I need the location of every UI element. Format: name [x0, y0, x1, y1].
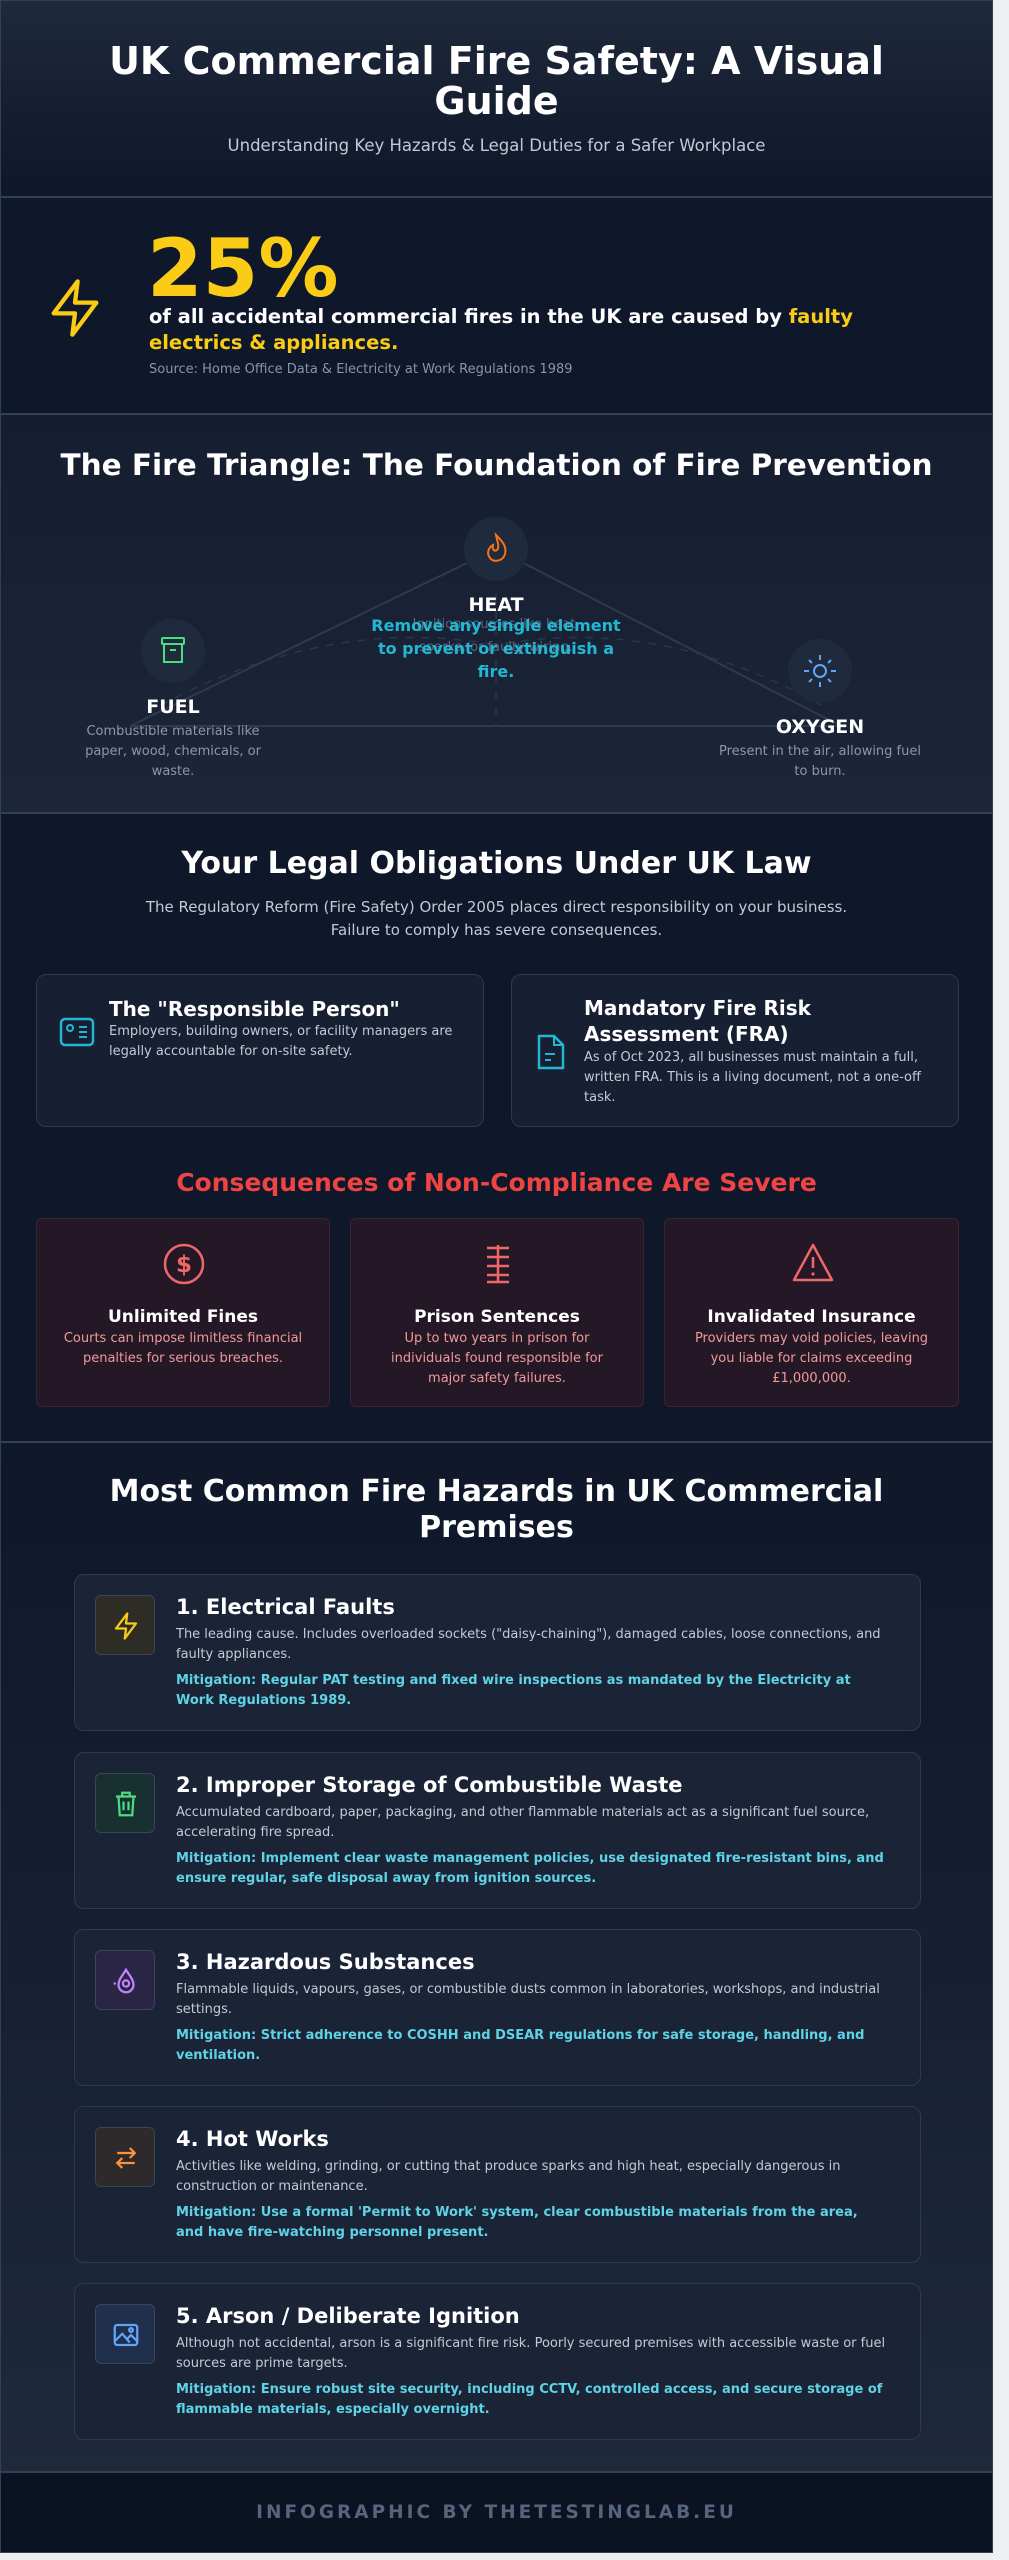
card: unlimited fines: Courts can impose limitless financial	[64, 1331, 302, 1346]
hazard 5: 5. Arson / Deliberate Ignition	[176, 2304, 520, 2328]
icon: lightning bolt	[52, 279, 98, 337]
hazard 4: Activities like welding, grinding, or cutting that produce sparks and high heat, especially dangerous in construction or maintenance.	[176, 2159, 841, 2194]
hazard 5: Although not accidental, arson is a significant fire risk. Poorly secured premises with accessible waste or fuel sources are prime targets.	[176, 2336, 885, 2371]
icon: bin	[161, 637, 185, 663]
card: insurance: Invalidated Insurance	[707, 1307, 916, 1327]
icon: id card	[60, 1018, 94, 1046]
intro text: The Regulatory Reform (Fire Safety) Order 2005 places direct responsibility on your business.	[146, 898, 847, 916]
title	[109, 39, 884, 123]
panel: legal obligations	[1, 814, 992, 1443]
icon: flame	[464, 517, 528, 581]
hazard 4: 4. Hot Works	[176, 2127, 329, 2151]
panel: fire triangle	[1, 415, 992, 814]
icon: document	[538, 1034, 564, 1070]
icon: trash	[95, 1773, 155, 1833]
hazard 5: Mitigation: Ensure robust site security, including CCTV, controlled access, and secure storage of flammable materials, especially overnight.	[176, 2382, 882, 2417]
subtitle: Understanding Key Hazards & Legal Duties for a Safer Workplace	[228, 136, 765, 155]
callout: remove element: Remove any single element to prevent or extinguish a fire.	[371, 616, 621, 681]
icon: sun	[800, 655, 836, 703]
node: oxygen: Present in the air, allowing fuel	[719, 744, 921, 759]
icon: bolt	[95, 1595, 155, 1655]
hazard 3: Mitigation: Strict adherence to COSHH and DSEAR regulations for safe storage, handling, and ventilation.	[176, 2028, 864, 2063]
hazard 1: The leading cause. Includes overloaded sockets ("daisy-chaining"), damaged cables, loose connections, and faulty appliances.	[176, 1627, 881, 1662]
hazard 4: Mitigation: Use a formal 'Permit to Work' system, clear combustible materials from the area, and have fire-watching personnel present.	[176, 2205, 858, 2240]
hazard 3: 3. Hazardous Substances	[176, 1950, 475, 1974]
heading	[110, 1474, 883, 1545]
card: unlimited fines: Unlimited Fines	[108, 1307, 258, 1327]
intro text	[146, 898, 847, 939]
title: UK Commercial Fire Safety: A Visual	[109, 39, 884, 83]
node: heat: HEAT	[468, 594, 524, 616]
card: prison: Prison Sentences	[414, 1307, 580, 1327]
node: oxygen: OXYGEN	[776, 716, 864, 738]
card: fire risk assessment: As of Oct 2023, all businesses must maintain a full, written FRA. This is a living document, not a one-off task.	[584, 1050, 921, 1105]
icon: drop	[95, 1950, 155, 2010]
triangle diagram	[130, 562, 837, 727]
card: insurance: Providers may void policies, leaving you liable for claims exceeding £1,000,000.	[695, 1331, 928, 1386]
icon: dollar	[164, 1244, 204, 1284]
stat text: of all accidental commercial fires in the UK are caused by faulty	[149, 305, 853, 328]
card: unlimited fines	[36, 1218, 330, 1407]
node: fuel: FUEL	[146, 696, 200, 718]
icon: dollar: $	[176, 1252, 192, 1278]
card: fire risk assessment: Mandatory Fire Risk	[584, 996, 811, 1020]
heat description (faint, behind): Ignition sources like heat, sparks, or faulty wiring.	[413, 617, 579, 655]
hazard 1: 1. Electrical Faults	[176, 1595, 395, 1619]
hazard 3	[74, 1929, 921, 2086]
node: heat	[464, 517, 528, 616]
card: responsible person: The "Responsible Person"	[109, 997, 400, 1021]
icon: bars	[487, 1245, 509, 1284]
intro text: Failure to comply has severe consequences.	[331, 921, 662, 939]
title: Guide	[434, 79, 559, 123]
hazard 4	[74, 2106, 921, 2263]
icon: arrows	[95, 2127, 155, 2187]
hazard 2: Mitigation: Implement clear waste management policies, use designated fire-resistant bins, and ensure regular, safe disposal away from ignition sources.	[176, 1851, 884, 1886]
hazard 5	[74, 2283, 921, 2440]
node: oxygen: to burn.	[794, 764, 846, 779]
footer	[1, 2473, 992, 2554]
node: fuel	[85, 637, 261, 779]
card: insurance	[664, 1218, 959, 1407]
card: unlimited fines: penalties for serious breaches.	[83, 1351, 283, 1366]
node: oxygen	[719, 655, 921, 779]
hazard 3: Flammable liquids, vapours, gases, or combustible dusts common in laboratories, workshops, and industrial settings.	[176, 1982, 880, 2017]
stat text: electrics & appliances.	[149, 331, 398, 354]
card: fire risk assessment	[511, 974, 959, 1127]
card: prison	[350, 1218, 644, 1407]
big stat: 25%	[147, 222, 338, 315]
header	[1, 1, 992, 198]
hazard 2: Accumulated cardboard, paper, packaging, and other flammable materials act as a significant fuel source, accelerating fire spread.	[176, 1805, 869, 1840]
heading: Premises	[419, 1510, 574, 1545]
card: responsible person	[36, 974, 484, 1127]
source: Source: Home Office Data & Electricity at Work Regulations 1989	[149, 362, 573, 377]
heading: The Fire Triangle: The Foundation of Fire Prevention	[60, 448, 932, 482]
hazard 2: 2. Improper Storage of Combustible Waste	[176, 1773, 683, 1797]
icon: image	[95, 2304, 155, 2364]
panel: hazards	[1, 1443, 992, 2473]
heading: consequences: Consequences of Non-Compliance Are Severe	[176, 1168, 817, 1197]
heading: Most Common Fire Hazards in UK Commercial	[110, 1474, 883, 1509]
heading: Your Legal Obligations Under UK Law	[181, 846, 812, 881]
stat section	[1, 198, 992, 415]
node: fuel: Combustible materials like paper, wood, chemicals, or waste.	[85, 724, 261, 779]
hazard 2	[74, 1752, 921, 1909]
stat text	[149, 305, 853, 354]
card: prison: Up to two years in prison for individuals found responsible for major safety failures.	[391, 1331, 603, 1386]
hazard 1	[74, 1574, 921, 1731]
icon: warning	[792, 1244, 834, 1282]
card: responsible person: Employers, building owners, or facility managers are legally accountable for on-site safety.	[109, 1024, 452, 1059]
hazard 1: Mitigation: Regular PAT testing and fixed wire inspections as mandated by the Electricity at Work Regulations 1989.	[176, 1673, 851, 1708]
footer: INFOGRAPHIC BY THETESTINGLAB.EU	[256, 2502, 737, 2523]
card: fire risk assessment: Assessment (FRA)	[584, 1022, 789, 1046]
